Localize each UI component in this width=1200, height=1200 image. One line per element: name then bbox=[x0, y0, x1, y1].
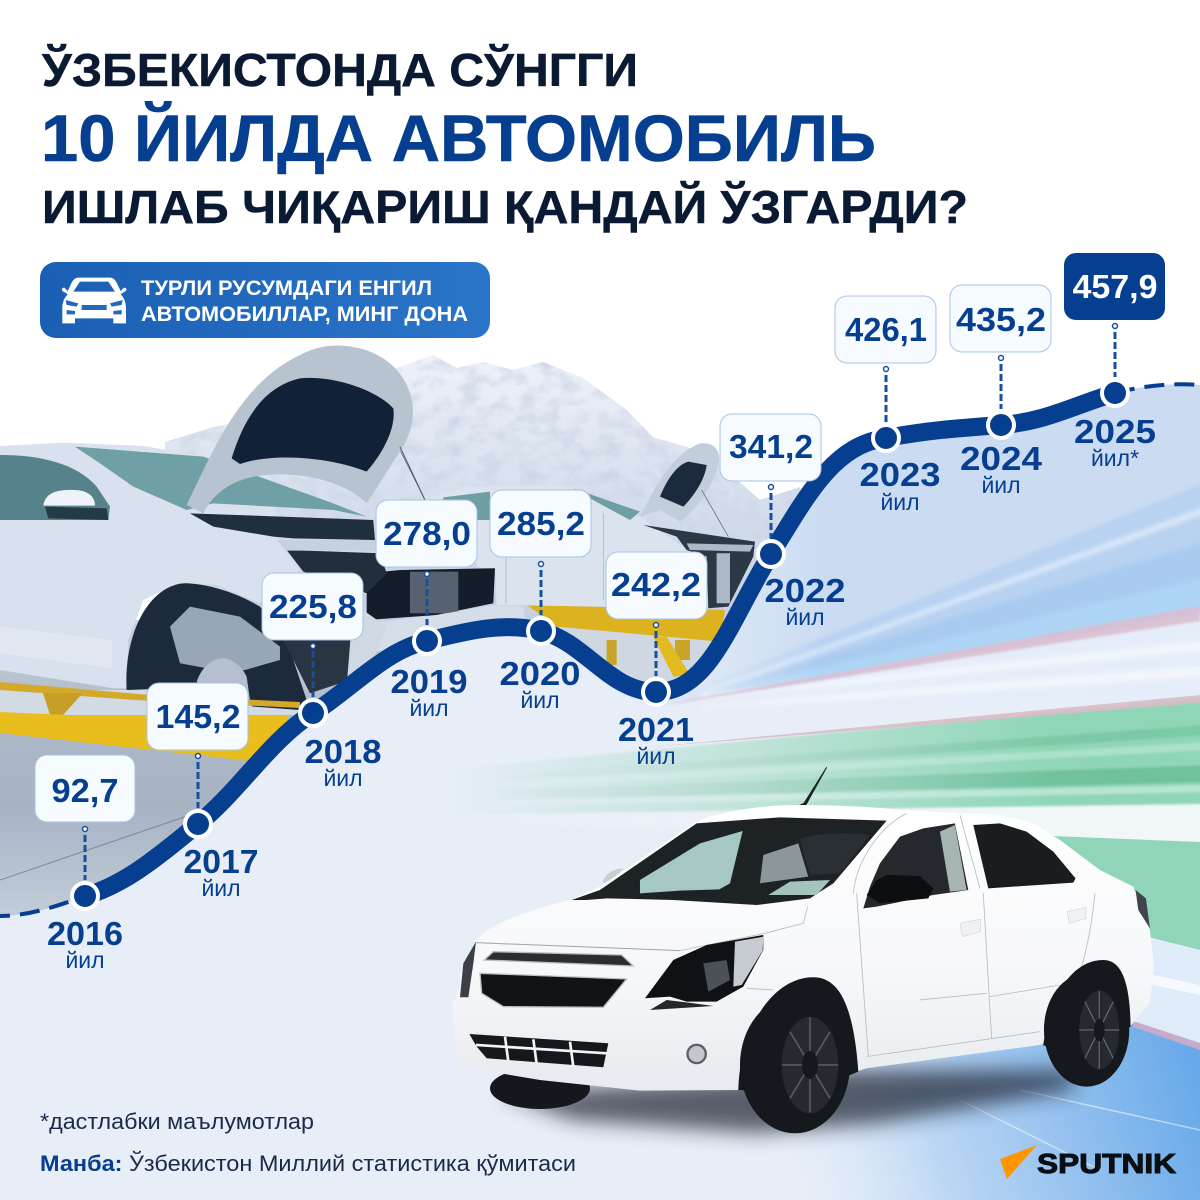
data point 2021: йил bbox=[636, 743, 676, 769]
title line 2: 10 ЙИЛДА АВТОМОБИЛЬ bbox=[41, 100, 876, 175]
data point 2025: 2025 bbox=[1074, 413, 1156, 450]
far-side front wheel bbox=[490, 1068, 590, 1109]
windshield bbox=[75, 447, 367, 517]
wing mirror bbox=[43, 490, 95, 506]
car body bbox=[433, 485, 708, 608]
main grille bbox=[480, 973, 627, 1007]
data point 2016: йил bbox=[65, 947, 105, 973]
data point 2019: йил bbox=[409, 695, 449, 721]
dashed lead-out bbox=[1115, 384, 1200, 393]
data point 2021: 242,2 bbox=[611, 566, 701, 603]
line chart bbox=[0, 253, 1200, 973]
green speed band bbox=[440, 697, 1200, 842]
data point 2017: 145,2 bbox=[156, 698, 240, 735]
data point 2016 bbox=[35, 755, 135, 973]
dark cowl bbox=[190, 513, 375, 540]
left headlight edge bbox=[460, 942, 476, 997]
body bbox=[0, 443, 300, 688]
blue floor bbox=[828, 1023, 1200, 1200]
hood crease bbox=[476, 943, 680, 951]
data point 2025 bbox=[1064, 253, 1165, 471]
floor line bbox=[0, 815, 190, 880]
antenna bbox=[793, 767, 827, 809]
data point 2016: 92,7 bbox=[52, 772, 118, 809]
data point 2020 bbox=[490, 490, 591, 713]
headlight bbox=[645, 935, 763, 1002]
pink streak lower bbox=[650, 695, 1200, 747]
green band behind car bbox=[1054, 836, 1200, 950]
white bumper piece bbox=[367, 605, 525, 653]
windows bbox=[440, 488, 640, 520]
white car illustration bbox=[453, 767, 1154, 1133]
data point 2017 bbox=[147, 683, 258, 901]
floor below lift bbox=[523, 623, 727, 683]
dashed lead-in bbox=[0, 896, 85, 916]
pale band above floor bbox=[1135, 940, 1200, 1042]
data point 2022: йил bbox=[785, 604, 825, 630]
icon: orange triangle bbox=[1000, 1145, 1037, 1179]
data point 2018: йил bbox=[323, 765, 363, 791]
pink streak upper bbox=[650, 606, 1200, 707]
data point 2018: 2018 bbox=[304, 733, 382, 770]
Sputnik logo bbox=[1000, 1145, 1176, 1179]
front wheel bbox=[740, 997, 850, 1133]
data point 2023: йил bbox=[880, 489, 920, 515]
data point 2024: 435,2 bbox=[956, 301, 1046, 338]
factory photo: mountains, cars on assembly line bbox=[0, 346, 800, 930]
rear wheel arch bbox=[1043, 960, 1131, 1060]
connector lines bbox=[82, 324, 1118, 880]
data point 2023: 2023 bbox=[860, 456, 940, 493]
door line bbox=[506, 513, 603, 603]
pink streak floor bbox=[1133, 1021, 1200, 1050]
rear wheel bbox=[1044, 973, 1129, 1087]
blue speed streaks bbox=[674, 384, 1200, 702]
data point 2024: 2024 bbox=[960, 440, 1043, 477]
radiator bbox=[367, 568, 495, 620]
data point 2022: 2022 bbox=[764, 572, 846, 609]
data point 2020: 285,2 bbox=[497, 505, 585, 542]
ground shadow bbox=[500, 1070, 1073, 1133]
rear side window bbox=[973, 823, 1076, 888]
wheel well bbox=[126, 583, 307, 710]
data point 2021: 2021 bbox=[618, 711, 694, 748]
yellow lift beams bbox=[0, 682, 300, 761]
lower bumper grille bbox=[469, 1034, 608, 1067]
side window bbox=[0, 455, 110, 520]
engine parts bbox=[287, 550, 387, 593]
icon: car front bbox=[62, 278, 126, 323]
title line 1: ЎЗБЕКИСТОНДА СЎНГГИ bbox=[41, 43, 638, 96]
engine bay bbox=[643, 525, 755, 608]
lower body highlight bbox=[0, 627, 112, 668]
floor highlights bbox=[960, 1090, 1200, 1170]
side mirror bbox=[867, 875, 933, 903]
car body bbox=[453, 805, 1154, 1091]
source: Манба: Ўзбекистон Миллий статистика қўмитаси bbox=[40, 1150, 576, 1176]
data point 2017: йил bbox=[201, 875, 241, 901]
legend pill bbox=[40, 262, 490, 338]
open hood bbox=[640, 443, 719, 522]
data point 2020: йил bbox=[520, 687, 560, 713]
factory floor bbox=[0, 620, 760, 930]
open hood bbox=[187, 346, 413, 513]
data point 2021 bbox=[606, 552, 707, 769]
data point 2025: йил* bbox=[1091, 445, 1139, 471]
data point 2023 bbox=[835, 296, 940, 515]
legend pill: АВТОМОБИЛЛАР, МИНГ ДОНА bbox=[141, 303, 468, 326]
data point 2024 bbox=[950, 285, 1051, 498]
trend curve bbox=[85, 393, 1115, 896]
light floor strip bbox=[0, 690, 300, 715]
tail light bbox=[1136, 890, 1150, 928]
background under the curve bbox=[0, 370, 1200, 1200]
title bbox=[41, 43, 968, 233]
data point 2024: йил bbox=[981, 472, 1021, 498]
title line 3: ИШЛАБ ЧИҚАРИШ ҚАНДАЙ ЎЗГАРДИ? bbox=[42, 180, 968, 233]
wordmark: SPUTNIK bbox=[1037, 1148, 1176, 1179]
data point 2020: 2020 bbox=[500, 655, 580, 692]
hood stay bbox=[400, 450, 728, 537]
data point 2025: 457,9 bbox=[1072, 268, 1158, 305]
door and body lines bbox=[680, 813, 1095, 1057]
data point 2019: 2019 bbox=[390, 663, 468, 700]
legend text: ТУРЛИ РУСУМДАГИ ЕНГИЛ bbox=[141, 277, 432, 300]
data point 2022 bbox=[720, 414, 846, 630]
data point 2022: 341,2 bbox=[729, 428, 813, 465]
fog light bbox=[686, 1044, 707, 1064]
data point 2018 bbox=[262, 573, 382, 791]
data point 2017: 2017 bbox=[184, 843, 258, 880]
door handles bbox=[960, 907, 1086, 937]
sunshade bbox=[640, 831, 743, 893]
data point 2018: 225,8 bbox=[269, 588, 357, 625]
windshield bbox=[572, 817, 887, 905]
front wheel arch bbox=[738, 977, 858, 1093]
yellow lift bbox=[527, 605, 725, 642]
front side window bbox=[863, 823, 968, 908]
footnote: *дастлабки маълумотлар bbox=[40, 1109, 314, 1134]
far side mirror bbox=[603, 868, 624, 885]
data point 2023: 426,1 bbox=[845, 311, 927, 348]
upper grille bbox=[484, 952, 633, 966]
second car on the line bbox=[367, 443, 755, 683]
mountain range bbox=[165, 355, 800, 640]
hood stay bbox=[400, 447, 425, 500]
near car bbox=[0, 346, 425, 710]
data point 2019 bbox=[376, 500, 477, 721]
data point 2019: 278,0 bbox=[383, 515, 471, 552]
interior: seats and dashboard bbox=[760, 843, 808, 883]
data point 2016: 2016 bbox=[47, 915, 123, 952]
